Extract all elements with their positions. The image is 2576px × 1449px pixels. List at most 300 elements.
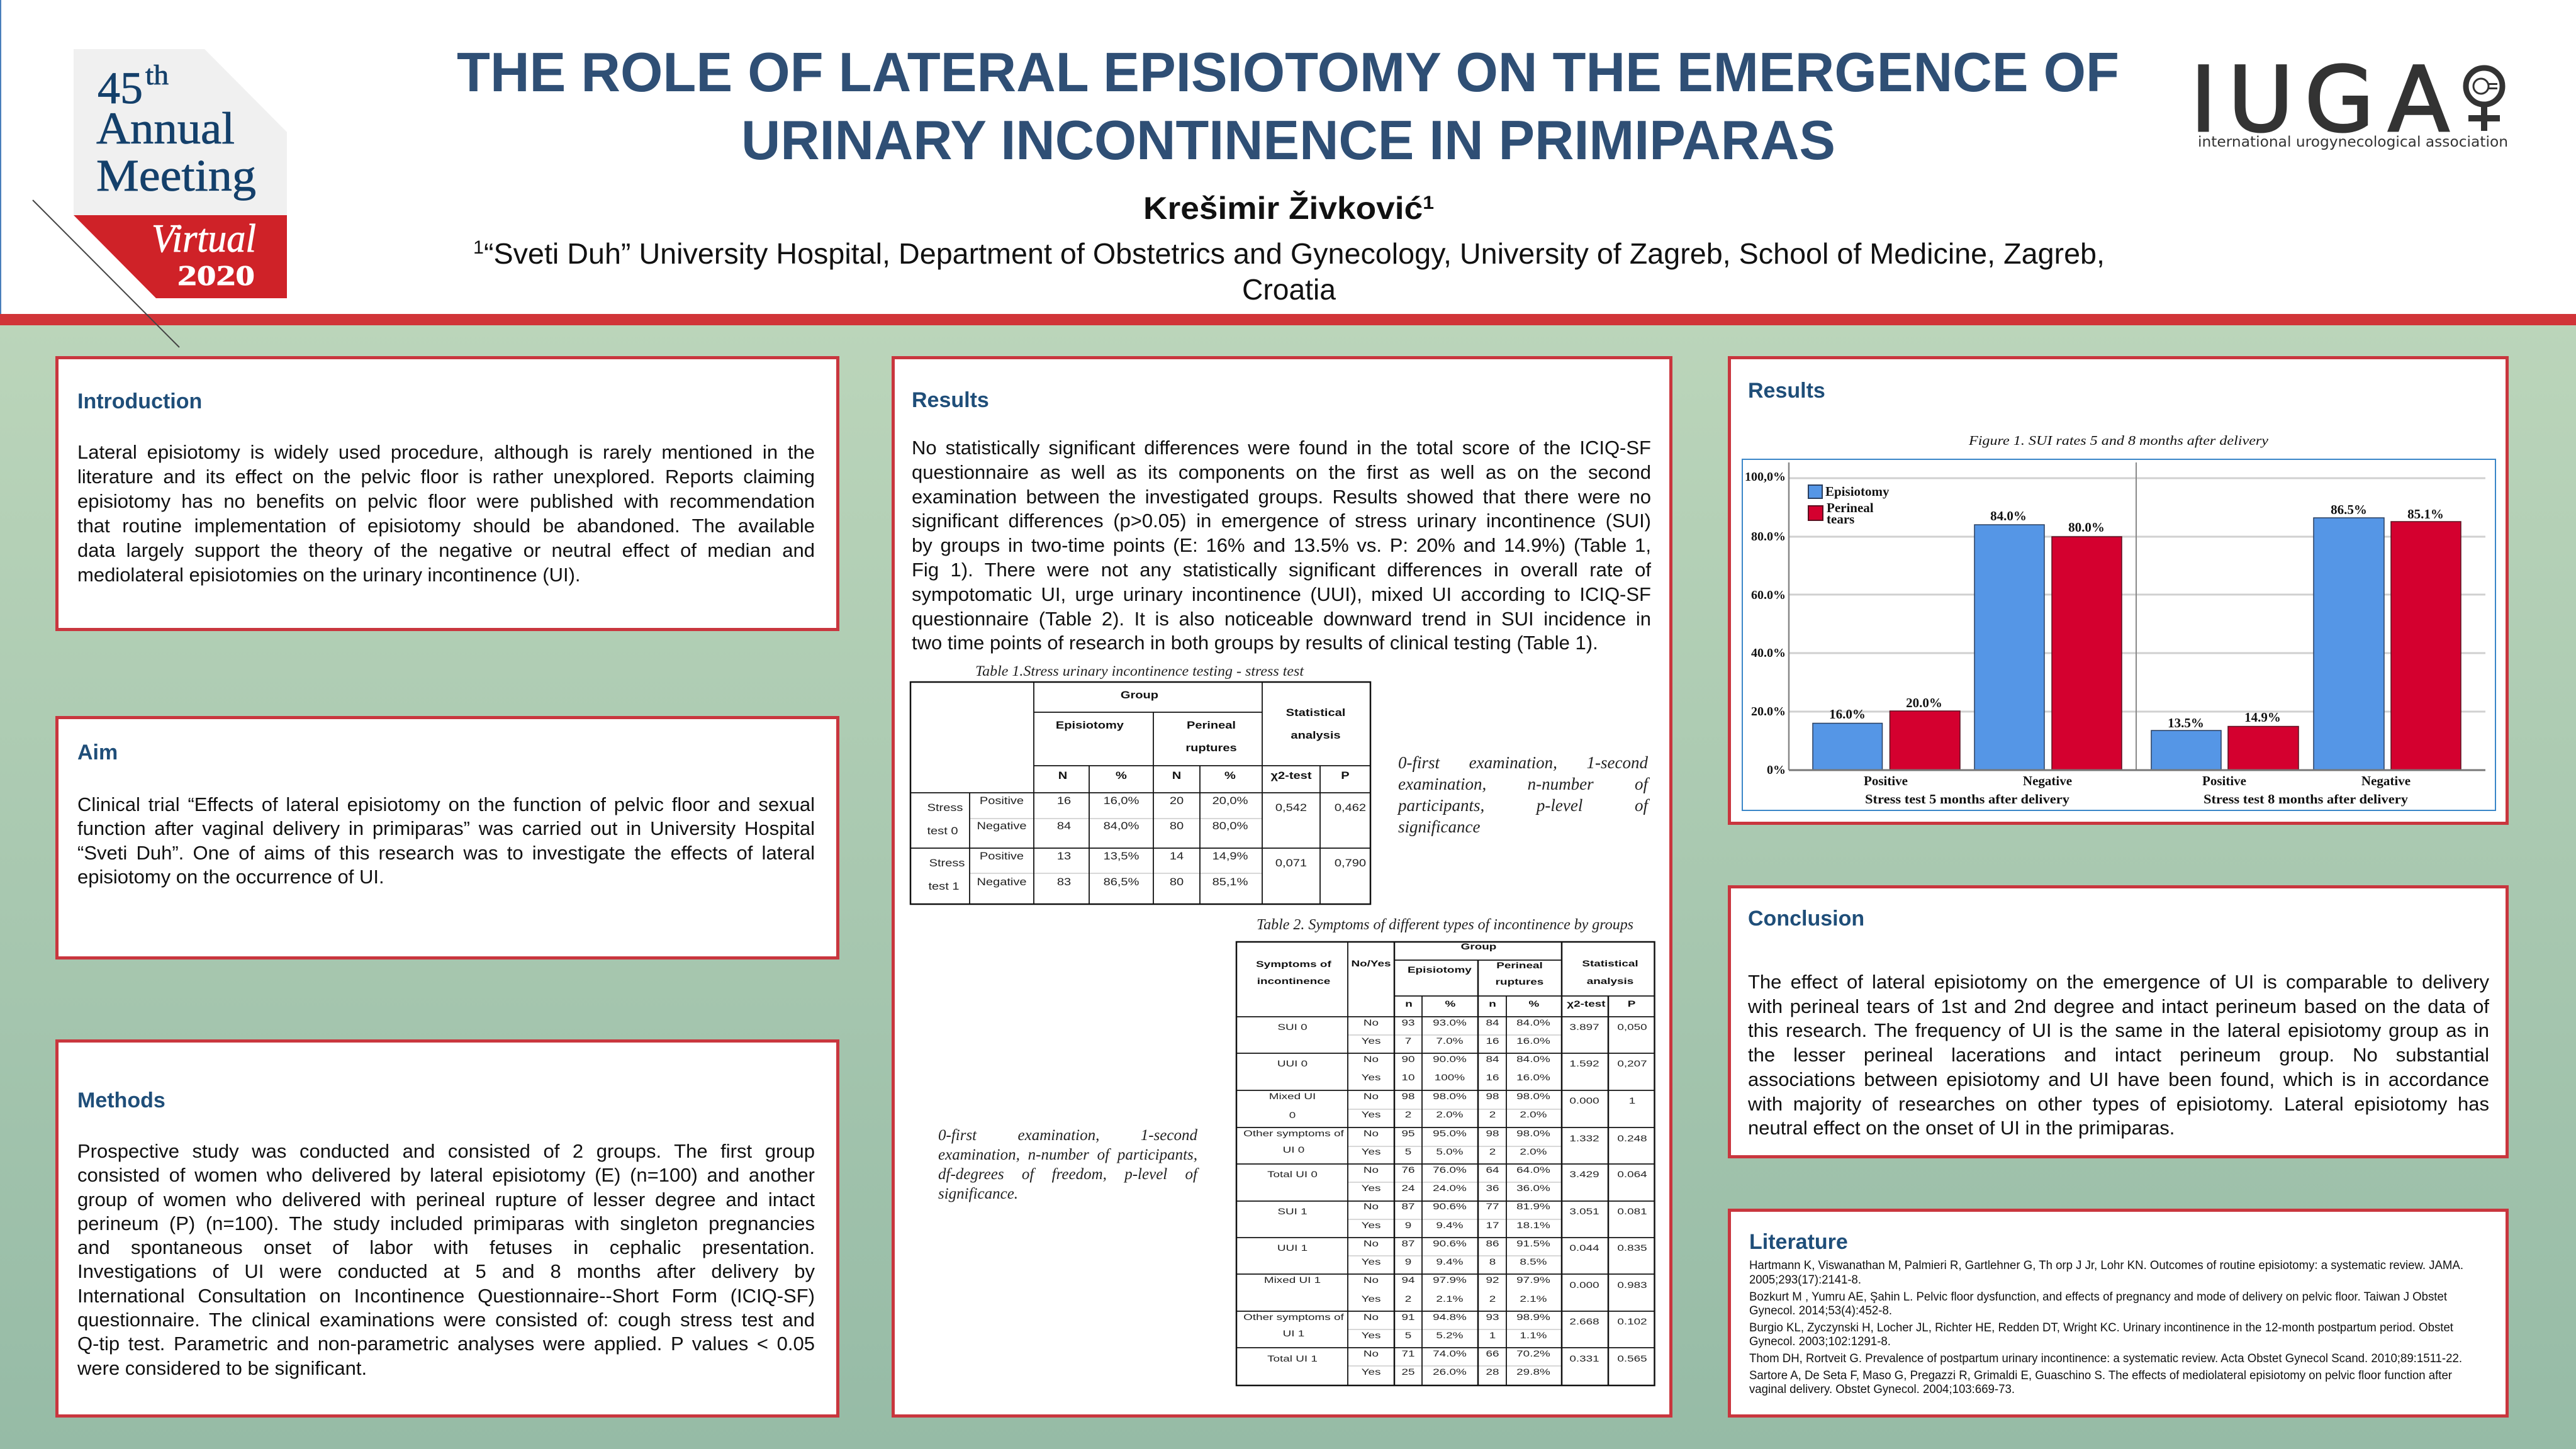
row: SUI 1: 9.4% [1436,1220,1464,1230]
category labels: Positive [1864,773,1908,788]
text: methods body: were considered to be significant. [77,1357,367,1379]
row: total UI 1: 70.2% [1516,1348,1550,1358]
legend: Perineal [1827,500,1874,515]
group labels [1865,792,2409,807]
row: SUI 1: 18.1% [1516,1220,1550,1230]
category labels [1864,773,2411,788]
bar chart: SUI rates: Figure 1. SUI rates 5 and 8 months after delivery [1968,433,2269,448]
row: SUI 0: 84.0% [1516,1017,1550,1027]
text: conclusion body: this research. The frequency of UI is the same in the lateral episiotomy group as in [1748,1019,2489,1041]
row: mixed UI 1: 2 [1405,1294,1411,1304]
row: total UI 0: 64.0% [1516,1165,1550,1175]
y axis labels: 20.0% [1751,705,1786,719]
table 1: stress test: 0,790 [1335,856,1366,869]
table 2 header: Symptoms of [1256,959,1331,969]
note: table 2 legend: df-degrees of freedom, p-level of [938,1166,1197,1183]
text: aim body: Clinical trial “Effects of lateral episiotomy on the function of pelvic floor and sexual [77,793,815,815]
row: UUI 0: UUI 0 [1277,1058,1308,1068]
category labels: Negative [2361,773,2411,788]
note: table 2 legend [938,1126,1197,1204]
row: other symptoms UI 1: 1.1% [1520,1330,1547,1340]
row: SUI 0: 16.0% [1516,1036,1550,1046]
row: UUI 0 [1277,1054,1647,1082]
row: mixed UI 0: 2.0% [1520,1109,1547,1119]
table 1: stress test: 0,542 [1275,801,1307,814]
table 1: stress test: 16 [1057,794,1071,807]
row: total UI 0: 76.0% [1433,1165,1467,1175]
table 1: stress test: 80 [1170,819,1184,832]
row: mixed UI 1: No [1364,1275,1379,1285]
text: results body: questionnaire (Table 2). It is also noticeable downward trend in SUI incidence in [912,608,1651,630]
category labels: Negative [2023,773,2072,788]
text: introduction body: data largely support the theory of the negative or neutral effect of median and [77,539,815,561]
row: mixed UI 0 [1269,1091,1635,1120]
text: references: 2005;293(17):2141-8. [1749,1273,1861,1287]
note: table 2 legend: 0-first examination, 1-second [938,1127,1197,1144]
heading: introduction: Introduction [77,389,202,413]
row: UUI 0: 0,207 [1617,1058,1647,1068]
row: other symptoms UI 0: 98 [1486,1128,1499,1138]
row: total UI 0: 76 [1401,1165,1415,1175]
row: UUI 0: 84.0% [1516,1054,1550,1064]
panel: aim [55,716,839,959]
group labels: Stress test 8 months after delivery [2204,792,2409,807]
row: UUI 0: 90.0% [1433,1054,1467,1064]
row: other symptoms UI 0: 95 [1401,1128,1415,1138]
row: other symptoms UI 1: Other symptoms of [1243,1312,1344,1322]
row: mixed UI 0: 2 [1405,1109,1411,1119]
row: UUI 1: 8.5% [1520,1256,1547,1267]
IUGA logo: international urogynecological association [2198,134,2508,150]
row: mixed UI 1: 2 [1489,1294,1496,1304]
row: total UI 1: 71 [1401,1348,1415,1358]
text: references: Thom DH, Rortveit G. Prevalence of postpartum urinary incontinence: a systematic review. Acta Obstet Gynecol Scand. 2010;89:1511-22. [1749,1352,2462,1365]
IUGA logo: I [2190,47,2217,152]
table 2 header: Statistical [1582,958,1638,968]
row: total UI 0 [1267,1165,1647,1193]
row: total UI 0: Yes [1362,1183,1380,1193]
row: other symptoms UI 0 [1243,1128,1647,1156]
row: total UI 1: 25 [1401,1367,1415,1377]
y axis labels: 80.0% [1751,530,1786,544]
table 1: stress test: Stress [927,801,963,814]
row: other symptoms UI 0: No [1364,1128,1379,1138]
table 1: stress test: 20,0% [1212,794,1248,807]
text: conclusion body: The effect of lateral episiotomy on the emergence of UI is comparable to delivery [1748,971,2489,993]
row: other symptoms UI 0: 5.0% [1436,1146,1464,1156]
table 1: stress test: test 1 [928,880,960,892]
row: other symptoms UI 1: 2.668 [1569,1316,1599,1326]
row: other symptoms UI 0: 2.0% [1520,1146,1547,1156]
panel: conclusion [1728,885,2509,1158]
row: total UI 1: 74.0% [1433,1348,1467,1358]
table 1: stress test: test 0 [927,824,958,837]
row: other symptoms UI 1: Yes [1362,1330,1380,1340]
table 1: stress test: 83 [1057,875,1071,888]
text: introduction body: literature and its effect on the pelvic floor is rather unexplored. Reports claiming [77,466,815,488]
row: SUI 1: No [1364,1201,1379,1211]
y axis labels [1745,470,1786,777]
text: aim body: “Sveti Duh”. One of aims of this research was to investigate the effects of lateral [77,842,815,864]
table 1: stress test: N [1058,769,1067,781]
row: SUI 1: 0.081 [1617,1206,1647,1216]
panel: literature [1728,1209,2509,1418]
text: conclusion body: neutral effect on the onset of UI in the primiparas. [1748,1117,2175,1139]
table 1: stress test: 14 [1170,849,1184,862]
row: total UI 1: 66 [1486,1348,1499,1358]
text: results body: questionnaire as well as its components on the first as well as on the second [912,461,1651,483]
panel: methods [55,1039,839,1418]
row: UUI 1: 9 [1405,1256,1411,1267]
row: UUI 0: 100% [1435,1072,1465,1082]
row: SUI 1: SUI 1 [1277,1206,1308,1216]
row: total UI 1: 0.331 [1569,1353,1599,1363]
heading: literature: Literature [1749,1230,1848,1254]
row: mixed UI 1: 2.1% [1520,1294,1547,1304]
panel: results middle [892,356,1672,1418]
row: SUI 1: 77 [1486,1201,1499,1211]
row: UUI 0: No [1364,1054,1379,1064]
red header bar [0,314,2576,325]
row: UUI 1: 8 [1489,1256,1496,1267]
row: UUI 1: UUI 1 [1277,1243,1308,1253]
conference badge: 2020 [177,259,255,291]
value labels: 16.0% [1829,707,1866,722]
row: total UI 1: 28 [1486,1367,1499,1377]
text: results body: No statistically significant differences were found in the total score of the ICIQ-SF [912,437,1651,459]
table 2 header: incontinence [1257,976,1330,986]
table 1: stress test: 85,1% [1212,875,1248,888]
text: results body: examination between the investigated groups. Results showed that there were no [912,486,1651,508]
table 2 header: ruptures [1496,976,1543,987]
heading: results: Results [912,388,989,412]
row: mixed UI 1: 97.9% [1433,1275,1467,1285]
table 1: stress test: % [1116,769,1127,781]
note: table 1 legend [1398,752,1648,837]
table 1: stress test: 86,5% [1104,875,1139,888]
table 1: stress test: 13,5% [1104,849,1139,862]
table 2 header [1256,941,1638,1009]
row: UUI 1 [1277,1238,1647,1267]
row: mixed UI 0: 98 [1401,1091,1415,1101]
row: UUI 1: 0.835 [1617,1243,1647,1253]
value labels: 20.0% [1906,695,1942,710]
table 1: stress test: Group [1121,688,1158,701]
affiliation: 1 [473,237,484,258]
row: mixed UI 1: 2.1% [1436,1294,1464,1304]
row: mixed UI 1: 0.983 [1617,1280,1647,1290]
row: mixed UI 1: 94 [1401,1275,1415,1285]
row: mixed UI 1: 92 [1486,1275,1499,1285]
table 1: stress test: χ2-test [1270,769,1312,781]
row: SUI 0: 84 [1486,1017,1499,1027]
row: mixed UI 0: 0 [1289,1110,1296,1120]
text: methods body: and spontaneous onset of labor with fetuses in cephalic presentation. [77,1236,815,1258]
table 1: stress test: Table 1.Stress urinary incontinence testing - stress test [975,663,1304,679]
text: results body: significant differences (p>0.05) in emergence of stress urinary incontinence (SUI) [912,510,1651,532]
text: conclusion body [1748,970,2489,1141]
row: SUI 0: Yes [1362,1036,1380,1046]
table 2 header: n [1405,999,1413,1009]
row: SUI 1: 87 [1401,1201,1415,1211]
table 1: stress test: 13 [1057,849,1071,862]
row: mixed UI 1: Yes [1362,1294,1380,1304]
row: total UI 1: 26.0% [1433,1367,1467,1377]
table 1: stress test: ruptures [1185,741,1237,754]
row: UUI 0: 84 [1486,1054,1499,1064]
table 1: stress test: 16,0% [1104,794,1139,807]
conference badge: th [145,60,169,91]
text: aim body: function after vaginal delivery in primiparas” was carried out in University Hospital [77,817,815,839]
text: conclusion body: with majority of researches on other types of episiotomy. Lateral episiotomy has [1748,1093,2489,1115]
text: introduction body: mediolateral episiotomies on the urinary incontinence (UI). [77,564,581,586]
legend: Episiotomy [1825,484,1890,499]
text: results body [912,436,1651,656]
table 1: stress test: Statistical [1286,706,1345,719]
row: other symptoms UI 1: 93 [1486,1312,1499,1322]
text: aim body [77,793,815,889]
author: Krešimir Živković [1143,191,1406,226]
row: other symptoms UI 0: 95.0% [1433,1128,1467,1138]
row: UUI 1: 87 [1401,1238,1415,1248]
row: UUI 1: 86 [1486,1238,1499,1248]
text: aim body: episiotomy on the occurrence of UI. [77,866,384,888]
title [457,41,2119,171]
row: total UI 1: 0.565 [1617,1353,1647,1363]
note: table 2 legend: significance. [938,1185,1018,1202]
conference badge: 45 [98,63,143,113]
table 1: stress test: P [1341,769,1350,781]
row: other symptoms UI 0: 5 [1405,1146,1411,1156]
value labels: 80.0% [2068,520,2105,535]
title: THE ROLE OF LATERAL EPISIOTOMY ON THE EMERGENCE OF [457,41,2119,103]
text: introduction body: that routine implementation of episiotomy should be abandoned. The available [77,515,815,537]
row: SUI 0: 93 [1401,1017,1415,1027]
row: other symptoms UI 0: 2 [1489,1146,1496,1156]
affiliation: “Sveti Duh” University Hospital, Department of Obstetrics and Gynecology, University of Zagreb, School of Medicine, Zagreb, [484,237,2105,270]
value labels: 14.9% [2244,710,2281,725]
row: UUI 1: 90.6% [1433,1238,1467,1248]
y axis labels: 60.0% [1751,588,1786,602]
conference badge: Meeting [96,150,256,201]
row: UUI 0: 10 [1401,1072,1415,1082]
row: total UI 1: Total UI 1 [1267,1353,1318,1363]
table 1: stress test: Perineal [1187,719,1236,731]
row: UUI 1: 91.5% [1516,1238,1550,1248]
row: total UI 1 [1267,1348,1647,1377]
text: conclusion body: associations between episiotomy and UI have been found, which is in accordance [1748,1068,2489,1090]
text: methods body: questionnaire. The clinical examinations were consisted of: cough stress test and [77,1309,815,1331]
table 1: stress test: Negative [977,875,1027,888]
table 1: stress test: 0,071 [1275,856,1307,869]
row: other symptoms UI 0: 98.0% [1516,1128,1550,1138]
row: SUI 0: 16 [1486,1036,1499,1046]
row: other symptoms UI 1: 94.8% [1433,1312,1467,1322]
row: other symptoms UI 1: UI 1 [1283,1328,1304,1338]
note: table 1 legend: 0-first examination, 1-second [1398,753,1648,772]
row: UUI 1: No [1364,1238,1379,1248]
row: UUI 0: 16.0% [1516,1072,1550,1082]
note: table 1 legend: participants, p-level of [1398,796,1648,815]
row: mixed UI 1 [1264,1275,1647,1304]
legend: tears [1827,512,1854,527]
table 1: stress test: 0,462 [1335,801,1366,814]
note: table 1 legend: examination, n-number of [1398,775,1648,793]
row: other symptoms UI 0: Other symptoms of [1243,1128,1344,1138]
text: introduction body: episiotomy has no benefits on pelvic floor were published with recommendation [77,490,815,512]
conference badge [32,49,287,348]
text: conclusion body: the lesser perineal lacerations and intact perineum group. No substantial [1748,1044,2489,1066]
row: UUI 0: Yes [1362,1072,1380,1082]
row: UUI 0: 1.592 [1569,1058,1599,1068]
row: other symptoms UI 1: No [1364,1312,1379,1322]
row: SUI 0: 7.0% [1436,1036,1464,1046]
note: table 2 legend: examination, n-number of participants, [938,1146,1197,1163]
row: total UI 0: 3.429 [1569,1169,1599,1179]
table 2 header: % [1445,999,1456,1009]
row: SUI 1: 81.9% [1516,1201,1550,1211]
text: introduction body: Lateral episiotomy is widely used procedure, although is rarely mentioned in the [77,441,815,463]
table 1: stress test: 84 [1057,819,1071,832]
table 1: stress test: Negative [977,819,1027,832]
table 2 header: % [1529,999,1540,1009]
group labels: Stress test 5 months after delivery [1865,792,2070,807]
row: UUI 1: 0.044 [1569,1243,1599,1253]
row: mixed UI 1: 0.000 [1569,1280,1599,1290]
IUGA logo: A [2388,47,2450,152]
text: references: vaginal delivery. Obstet Gynecol. 2004;103:669-73. [1749,1383,2015,1396]
row: mixed UI 1: Mixed UI 1 [1264,1275,1321,1285]
text: references [1749,1253,2473,1397]
row: SUI 1: 3.051 [1569,1206,1599,1216]
row: SUI 0: 3.897 [1569,1022,1599,1032]
row: SUI 0: 93.0% [1433,1017,1467,1027]
row: SUI 0: SUI 0 [1277,1022,1308,1032]
text: methods body: Prospective study was conducted and consisted of 2 groups. The first group [77,1140,815,1162]
text: methods body: Q-tip test. Parametric and non-parametric analyses were applied. P values < 0.05 [77,1333,815,1355]
table 1: stress test: 14,9% [1212,849,1248,862]
table 1: stress test: 80 [1170,875,1184,888]
table 2 header: No/Yes [1351,958,1391,968]
table 2 header: n [1489,999,1496,1009]
row: mixed UI 0: 1 [1629,1095,1635,1105]
panel: results right [1728,356,2509,825]
value labels [1829,502,2444,730]
row: other symptoms UI 0: Yes [1362,1146,1380,1156]
table 1: stress test: Positive [980,849,1024,862]
row: other symptoms UI 1: 91 [1401,1312,1415,1322]
row: other symptoms UI 1: 1 [1489,1330,1496,1340]
y axis labels: 0% [1767,763,1786,777]
row: UUI 1: 9.4% [1436,1256,1464,1267]
table 2 header: Group [1461,941,1496,951]
row: total UI 0: 24.0% [1433,1183,1467,1193]
row: SUI 0: 0,050 [1617,1022,1647,1032]
y axis labels: 40.0% [1751,646,1786,660]
text: conclusion body: with perineal tears of 1st and 2nd degree and intact perineum based on the data of [1748,995,2489,1017]
row: other symptoms UI 1: 5 [1405,1330,1411,1340]
text: results body: by groups in two-time points (E: 16% and 13.5% vs. P: 20% and 14.9%) (Table 1, [912,534,1651,556]
conference badge: Virtual [152,216,256,260]
text: methods body: group of women who delivered with perineal rupture of lesser degree and intact [77,1189,815,1211]
table 2: symptoms by group: Table 2. Symptoms of different types of incontinence by groups [1257,917,1633,933]
table 1: stress test: % [1224,769,1236,781]
bars: episiotomy [1813,518,2384,770]
row: UUI 1: Yes [1362,1256,1380,1267]
value labels: 85.1% [2407,506,2444,522]
IUGA logo: U [2228,47,2293,152]
panel: introduction [55,356,839,631]
table 2 header: P [1628,999,1635,1009]
text: references: Gynecol. 2014;53(4):452-8. [1749,1304,1892,1318]
text: methods body: perineum (P) (n=100). The study included primiparas with singleton pregnancies [77,1212,815,1234]
affiliation [473,237,2105,306]
table 2 header: Episiotomy [1408,965,1472,975]
row: total UI 1: 29.8% [1516,1367,1550,1377]
text: references: Gynecol. 2003;102:1291-8. [1749,1335,1891,1348]
row: SUI 1: 9 [1405,1220,1411,1230]
table 2 header: χ2-test [1567,999,1606,1009]
row: other symptoms UI 1: 98.9% [1516,1312,1550,1322]
row: total UI 0: 36 [1486,1183,1499,1193]
heading: aim: Aim [77,741,118,764]
row: total UI 1: No [1364,1348,1379,1358]
row: other symptoms UI 1: 0.102 [1617,1316,1647,1326]
text: results body: sympotomatic UI, urge urinary incontinence (UUI), mixed UI according to ICIQ-SF [912,583,1651,605]
row: total UI 0: 36.0% [1516,1183,1550,1193]
row: total UI 1: Yes [1362,1367,1380,1377]
row: other symptoms UI 0: 1.332 [1569,1133,1599,1143]
row: mixed UI 0: 2 [1489,1109,1496,1119]
text: introduction body [77,441,815,586]
table 1: stress test: Episiotomy [1056,719,1124,731]
table 2 header: Perineal [1496,960,1543,970]
row: other symptoms UI 1 [1243,1312,1647,1340]
value labels: 86.5% [2331,502,2367,517]
row: mixed UI 0: 98 [1486,1091,1499,1101]
bar chart: SUI rates [1742,428,2495,812]
row: mixed UI 0: No [1364,1091,1379,1101]
text: results body: two time points of research in both groups by results of clinical testing (Table 1). [912,632,1598,654]
row: mixed UI 0: 98.0% [1433,1091,1467,1101]
background gradient [0,325,2576,1449]
category labels: Positive [2202,773,2246,788]
table 2: symptoms by group [1235,912,1656,1387]
row: total UI 0: 0.064 [1617,1169,1647,1179]
text: references: Burgio KL, Zyczynski H, Locher JL, Richter HE, Redden DT, Wright KC. Urinary incontinence in the 12-month postpartum period. Obstet [1749,1321,2454,1334]
row: mixed UI 0: 98.0% [1516,1091,1550,1101]
table 1: stress test: analysis [1291,729,1341,741]
note: table 1 legend: significance [1398,817,1480,836]
row: SUI 1: 90.6% [1433,1201,1467,1211]
text: references: Bozkurt M , Yumru AE, Şahin L. Pelvic floor dysfunction, and effects of pregnancy and mode of delivery on pelvic floor. Taiwan J Obstet [1749,1290,2448,1304]
y axis labels: 100,0% [1745,470,1786,484]
table 2 header: analysis [1587,976,1633,986]
author: 1 [1423,193,1434,213]
table 1: stress test: 80,0% [1212,819,1248,832]
IUGA logo: G [2305,47,2374,152]
text: methods body: International Consultation on Incontinence Questionnaire--Short Form (ICIQ-SF) [77,1285,815,1307]
text: references: Sartore A, De Seta F, Maso G, Pregazzi R, Grimaldi E, Guaschino S. The effects of mediolateral episiotomy on pelvic floor function after [1749,1369,2453,1382]
row: SUI 1 [1277,1201,1647,1230]
table 1: stress test: 20 [1170,794,1184,807]
row: total UI 0: Total UI 0 [1267,1169,1318,1179]
text: methods body: Investigations of UI were conducted at 5 and 8 months after delivery by [77,1260,815,1282]
conference badge: Annual [96,103,235,154]
table 1: stress test: Positive [980,794,1024,807]
row: mixed UI 0: Mixed UI [1269,1091,1316,1101]
row: mixed UI 0: 2.0% [1436,1109,1464,1119]
